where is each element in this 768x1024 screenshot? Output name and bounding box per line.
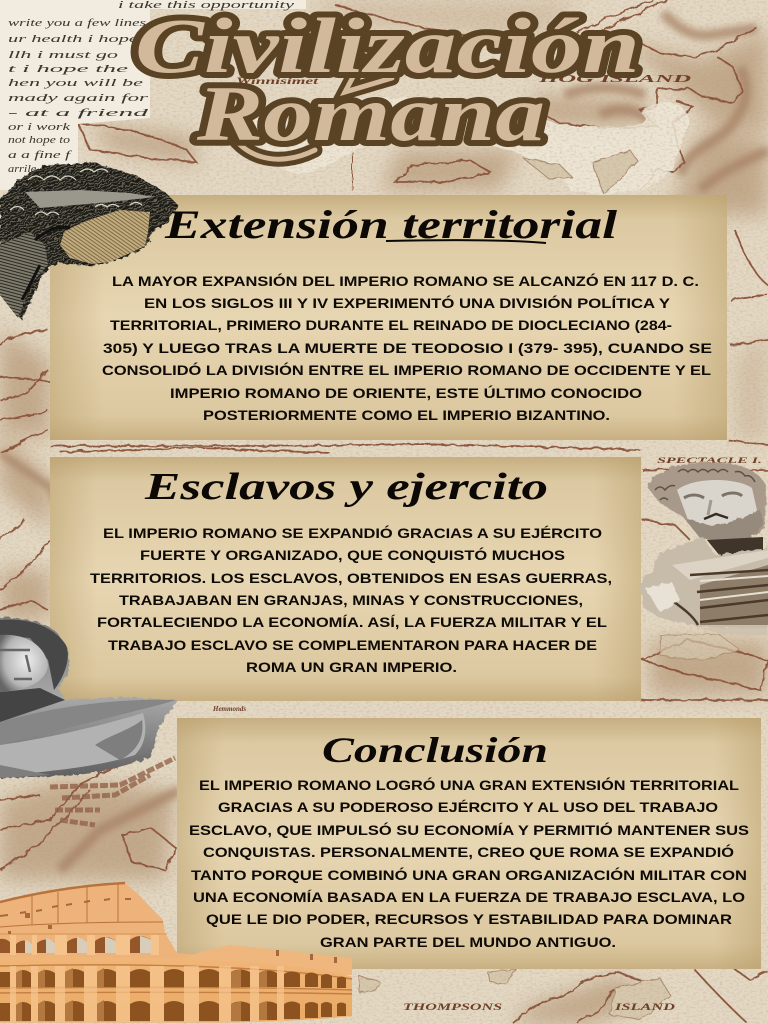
map labels: Hemmonds xyxy=(212,705,246,713)
text block: CONQUISTAS. PERSONALMENTE, CREO QUE ROMA SE EXPANDIÓ xyxy=(203,843,734,860)
handwritten letter collage: t i hope the xyxy=(8,63,128,75)
handwritten letter collage: mady again for xyxy=(8,92,149,104)
title xyxy=(135,2,640,159)
text block: GRAN PARTE DEL MUNDO ANTIGUO. xyxy=(320,934,616,950)
panel background xyxy=(50,195,727,440)
text block: POSTERIORMENTE COMO EL IMPERIO BIZANTINO. xyxy=(203,407,610,423)
handwritten letter collage: llh i must go xyxy=(8,49,119,61)
handwritten letter collage: arrile and xyxy=(8,163,59,175)
map labels xyxy=(212,74,762,1013)
text block: TERRITORIAL, PRIMERO DURANTE EL REINADO DE DIOCLECIANO (284- xyxy=(110,317,672,333)
text block: TERRITORIOS. LOS ESCLAVOS, OBTENIDOS EN ESAS GUERRAS, xyxy=(90,570,612,586)
window slots xyxy=(0,898,131,934)
text block: EL IMPERIO ROMANO SE EXPANDIÓ GRACIAS A SU EJÉRCITO xyxy=(103,524,602,541)
columns xyxy=(10,966,284,1022)
text block: TRABAJABAN EN GRANJAS, MINAS Y CONSTRUCCIONES, xyxy=(119,592,583,608)
handwritten letter collage: write you a few lines xyxy=(8,17,146,29)
panel background xyxy=(50,457,641,701)
text block: TRABAJO ESCLAVO SE COMPLEMENTARON PARA HACER DE xyxy=(108,637,597,653)
text block xyxy=(189,776,749,950)
map labels: THOMPSONS xyxy=(403,1003,502,1013)
panel background xyxy=(177,718,761,969)
colosseum illustration xyxy=(0,883,352,1022)
text block: QUE LE DIO PODER, RECURSOS Y ESTABILIDAD PARA DOMINAR xyxy=(206,911,732,927)
right rim xyxy=(177,945,352,975)
text block: ESCLAVO, QUE IMPULSÓ SU ECONOMÍA Y PERMITIÓ MANTENER SUS xyxy=(189,821,749,838)
text block: EL IMPERIO ROMANO LOGRÓ UNA GRAN EXTENSIÓN TERRITORIAL xyxy=(199,776,740,793)
statue: grey classical bust xyxy=(0,618,178,778)
text block: UNA ECONOMÍA BASADA EN LA FUERZA DE TRABAJO ESCLAVA, LO xyxy=(193,889,745,905)
arch shading xyxy=(16,968,267,1021)
lower tiers xyxy=(0,957,352,1022)
text block: LA MAYOR EXPANSIÓN DEL IMPERIO ROMANO SE ALCANZÓ EN 117 D. C. xyxy=(112,272,699,289)
text block: GRACIAS A SU PODEROSO EJÉRCITO Y AL USO DEL TRABAJO xyxy=(218,799,718,815)
text block: 305) Y LUEGO TRAS LA MUERTE DE TEODOSIO I (379- 395), CUANDO SE xyxy=(103,340,712,356)
panel: extensión territorial xyxy=(50,195,727,440)
street grid xyxy=(50,758,175,825)
statue: bearded bust xyxy=(640,462,768,636)
text block: TANTO PORQUE COMBINÓ UNA GRAN ORGANIZACIÓN MILITAR CON xyxy=(191,866,747,883)
handwritten letter collage: hen you will be xyxy=(8,77,143,89)
text block: IMPERIO ROMANO DE ORIENTE, ESTE ÚLTIMO CONOCIDO xyxy=(170,384,642,401)
handwritten letter collage: not hope to xyxy=(8,134,71,146)
map labels: HOG ISLAND xyxy=(537,74,691,85)
handwritten letter collage xyxy=(0,0,306,190)
text block: EN LOS SIGLOS III Y IV EXPERIMENTÓ UNA DIVISIÓN POLÍTICA Y xyxy=(144,294,671,311)
upper arches xyxy=(0,935,159,955)
heading: Extensión territorial xyxy=(164,202,618,247)
text block: FORTALECIENDO LA ECONOMÍA. ASÍ, LA FUERZA MILITAR Y EL xyxy=(97,614,608,630)
text block: CONSOLIDÓ LA DIVISIÓN ENTRE EL IMPERIO ROMANO DE OCCIDENTE Y EL xyxy=(102,361,712,378)
panel: esclavos y ejército xyxy=(50,457,641,701)
heading: Esclavos y ejercito xyxy=(144,466,548,508)
statue: engraved head xyxy=(0,163,178,320)
text block xyxy=(90,524,612,675)
handwritten letter collage: a a fine f xyxy=(8,149,73,161)
title swashes xyxy=(228,60,392,159)
handwritten letter collage: - at a friend xyxy=(8,107,149,119)
text block xyxy=(102,272,712,423)
panel: conclusión xyxy=(177,718,761,969)
map labels: Winnisimet xyxy=(236,76,319,86)
handwritten letter collage: or i work xyxy=(8,121,72,133)
upper back wall xyxy=(0,883,200,962)
text block: FUERTE Y ORGANIZADO, QUE CONQUISTÓ MUCHOS xyxy=(140,546,565,563)
text block: ROMA UN GRAN IMPERIO. xyxy=(246,659,457,675)
title: Romana xyxy=(196,70,545,157)
map labels: SPECTACLE I. xyxy=(657,456,762,465)
map labels: ISLAND xyxy=(613,1003,675,1013)
lower arches row 2 xyxy=(0,1001,346,1021)
handwritten letter collage: ur health i hope xyxy=(8,33,138,45)
lower arches row 1 xyxy=(0,969,346,988)
heading: Conclusión xyxy=(322,730,548,770)
title: Civilización xyxy=(135,2,640,89)
